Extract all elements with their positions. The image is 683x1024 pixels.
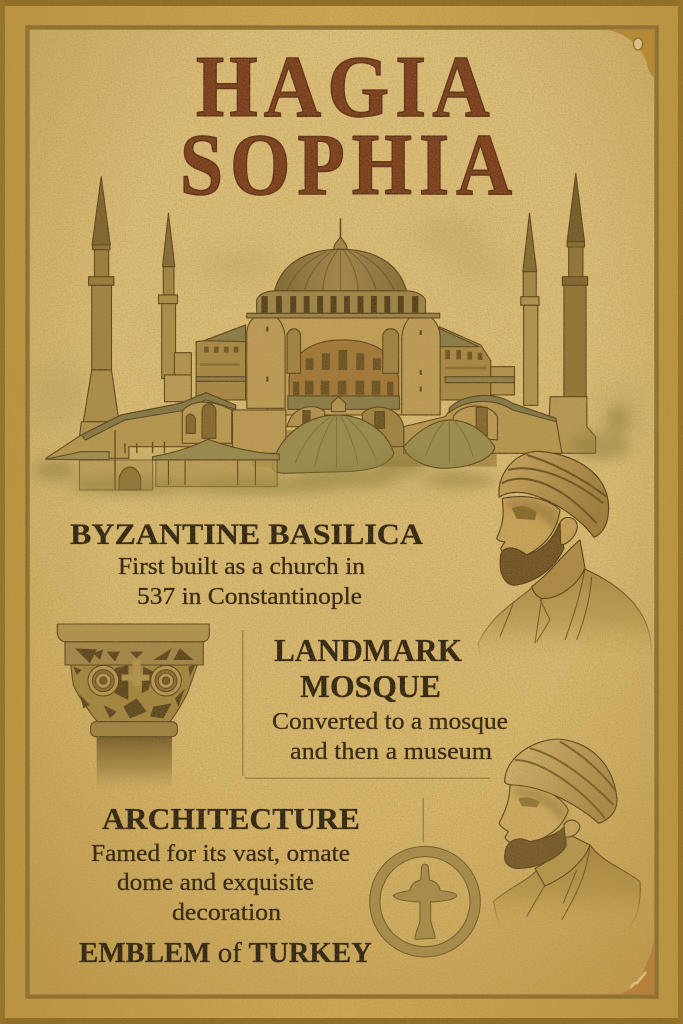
capital block <box>65 642 203 665</box>
right short minaret <box>521 213 539 405</box>
main arch and windows <box>288 340 399 409</box>
column capital <box>57 624 209 792</box>
main church building <box>46 218 562 490</box>
buttresses <box>247 314 440 415</box>
emblem of Turkey caption: EMBLEM of TURKEY <box>79 938 372 969</box>
upper robe lines <box>500 568 592 643</box>
capital spiral volutes <box>88 665 181 696</box>
upper neck and collar <box>532 540 585 598</box>
upper beard and moustache <box>500 523 564 585</box>
section: Architecture <box>91 801 360 926</box>
lower neck <box>535 833 590 886</box>
foreground shrubs and haze <box>33 406 630 494</box>
section: Byzantine Basilica: BYZANTINE BASILICA <box>70 518 423 551</box>
divider: mosque and architecture <box>245 778 490 779</box>
section: Landmark Mosque: Converted to a mosque <box>272 709 508 735</box>
torn corner: top right <box>606 30 654 78</box>
left lower aisle <box>46 393 286 458</box>
capital abacus <box>57 624 209 642</box>
section: Byzantine Basilica <box>70 518 423 610</box>
upper ear <box>560 517 577 545</box>
section: Landmark Mosque: LANDMARK <box>274 632 462 668</box>
capital cross ornament <box>122 659 149 686</box>
central wall <box>267 315 420 415</box>
lower face <box>499 785 568 843</box>
side wings <box>164 325 514 402</box>
capital astragal <box>91 722 177 737</box>
lower shoulders <box>493 845 640 930</box>
lower face shading <box>515 787 567 827</box>
half domes <box>272 415 495 473</box>
upper face shading <box>507 498 558 533</box>
Hagia Sophia illustration <box>30 173 644 494</box>
capital leaf ornament <box>73 648 195 718</box>
capital bell <box>71 665 197 722</box>
lower turban <box>505 739 617 823</box>
left short minaret <box>159 213 178 379</box>
lower porch with arches <box>46 430 279 490</box>
divider: column and mosque <box>242 630 244 776</box>
upper eye and brow <box>512 506 537 520</box>
emblem medallion <box>370 846 480 957</box>
lower ear <box>564 820 580 837</box>
right lower aisle <box>404 395 562 453</box>
main dome with finial <box>274 218 407 291</box>
section: Architecture: dome and exquisite <box>117 870 314 896</box>
column shaft <box>97 737 172 792</box>
drum with windows <box>247 291 440 318</box>
torn corner: bottom right <box>620 940 654 994</box>
title <box>180 38 519 213</box>
lower beard and moustache <box>505 825 566 868</box>
upper turban <box>499 451 609 537</box>
upper face <box>497 497 560 556</box>
upper shoulders <box>478 568 651 660</box>
portrait: lower turbaned man <box>493 739 640 930</box>
portrait: upper turbaned man <box>478 451 651 660</box>
title: SOPHIA <box>180 115 519 213</box>
section: Architecture: decoration <box>172 900 281 926</box>
right tall minaret <box>548 173 596 453</box>
mass behind lower domes <box>251 430 497 467</box>
section: Landmark Mosque: and then a museum <box>290 739 492 765</box>
section: Landmark Mosque: MOSQUE <box>300 668 441 704</box>
section: Architecture: Famed for its vast, ornate <box>91 841 350 867</box>
section: Landmark Mosque <box>272 632 508 765</box>
lower robe lines <box>527 845 590 920</box>
divider: above emblem <box>422 798 424 842</box>
haze behind the building <box>30 217 644 492</box>
section: Byzantine Basilica: First built as a church in <box>118 554 365 580</box>
section: Architecture: ARCHITECTURE <box>102 801 360 836</box>
lower turban folds <box>515 742 615 818</box>
title: HAGIA <box>196 38 496 136</box>
upper turban folds <box>502 455 607 523</box>
central exedra niche <box>287 397 404 447</box>
lower eye and brow <box>518 797 540 807</box>
left tall minaret <box>79 177 120 437</box>
section: Byzantine Basilica: 537 in Constantinople <box>137 584 362 610</box>
